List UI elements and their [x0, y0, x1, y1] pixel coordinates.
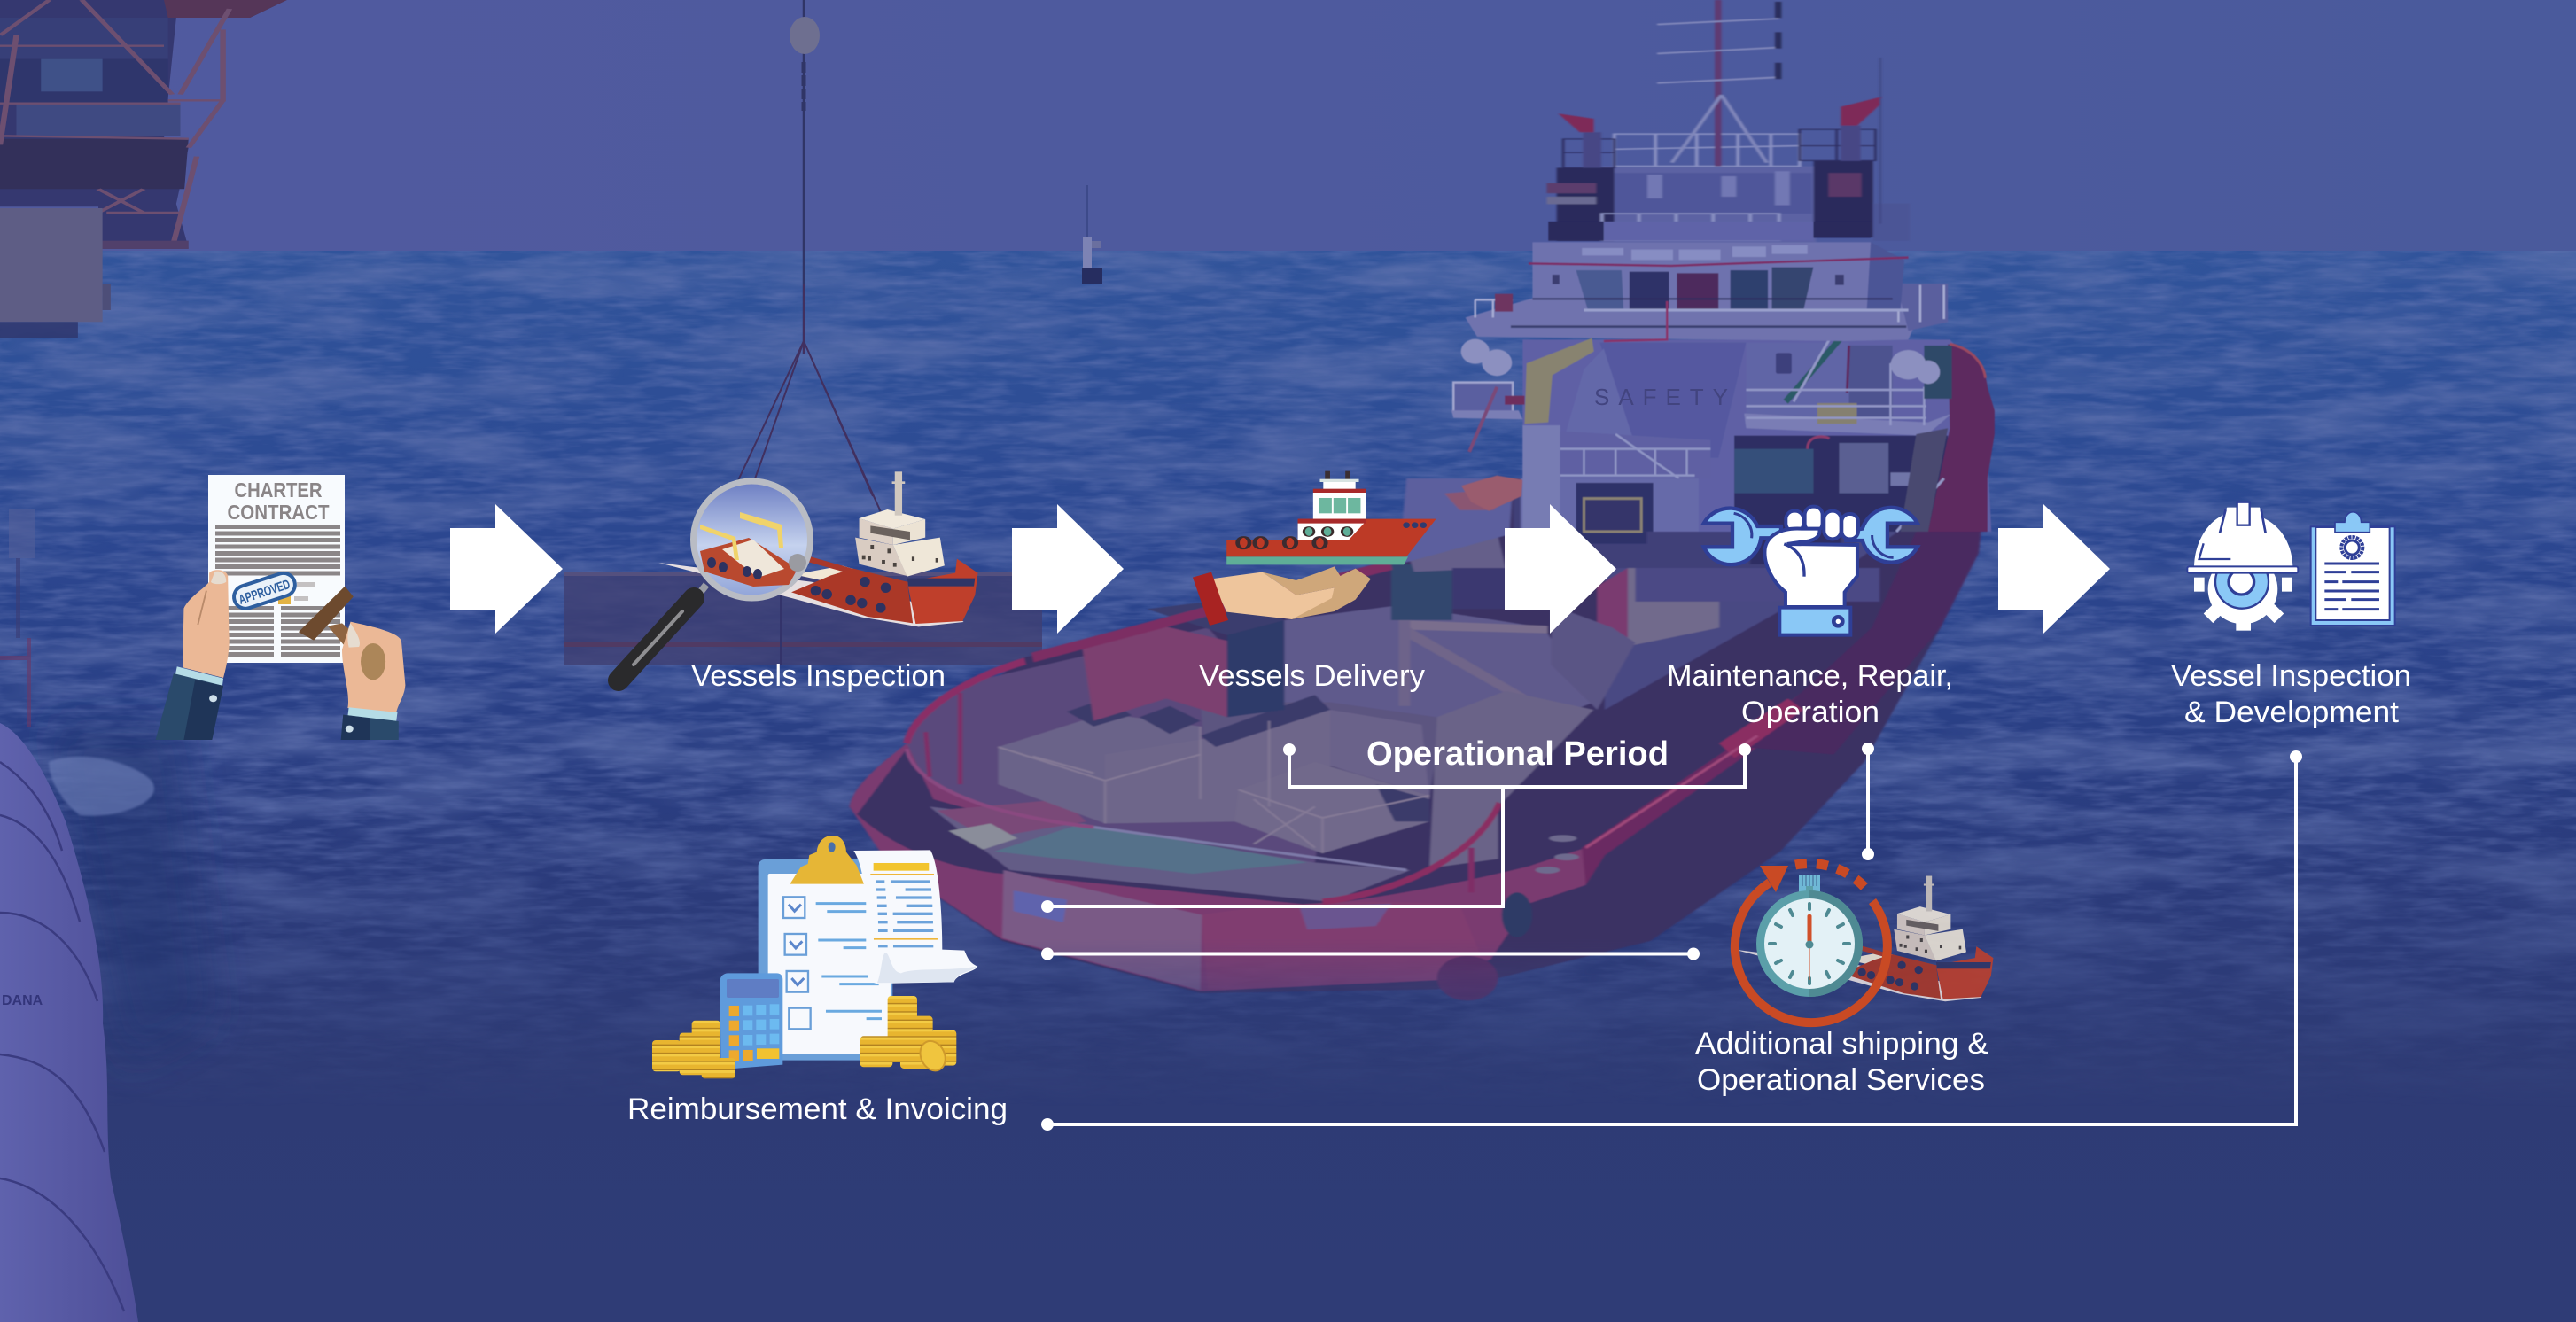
- handle: [696, 585, 706, 598]
- contract text lines: [215, 525, 340, 657]
- clipboard: [759, 859, 892, 1061]
- left wing: [1466, 284, 1948, 341]
- oil rig top left: [0, 0, 287, 338]
- lens: [693, 481, 810, 598]
- yellow crane: [1525, 338, 1594, 424]
- label: Reimbursement & Invoicing: Reimbursement & Invoicing: [627, 1093, 1008, 1126]
- round hawse: [1502, 892, 1532, 937]
- right bulwark: [1582, 583, 1954, 885]
- label: Maintenance, Repair, Operation: [1667, 659, 1953, 729]
- mid block: [1602, 167, 1816, 243]
- deck floor: [930, 806, 1410, 902]
- label: Vessel Inspection & Development: & Development: [2184, 696, 2400, 729]
- distant platform: [1082, 185, 1102, 284]
- hand: [1262, 566, 1371, 619]
- cabin: [1319, 479, 1359, 482]
- right wall: [1747, 343, 1849, 416]
- dark container column: [1227, 620, 1284, 717]
- crates: [999, 713, 1201, 823]
- calculator: [720, 973, 782, 1069]
- lower house dark: [1734, 436, 1948, 532]
- hull: [1226, 519, 1436, 556]
- house lower section: [1514, 478, 1856, 568]
- step 5: vessel inspection and development icon: [2187, 502, 2395, 631]
- mast and yardarms: [1715, 0, 1722, 167]
- label: Maintenance, Repair, Operation: Operation: [1741, 696, 1879, 729]
- reimbursement and invoicing icon: [652, 836, 977, 1078]
- checklist: [783, 897, 811, 1029]
- label: Additional shipping & Operational Services: Operational Services: [1697, 1063, 1985, 1097]
- left wrench: [1704, 509, 1781, 564]
- stairs: [1786, 335, 1843, 401]
- bridge-side deck space: [1604, 532, 1897, 709]
- maintenance to additional services: [1862, 743, 1874, 860]
- offshore supply vessel: hull and deck: [850, 478, 1987, 1000]
- main wall: [1522, 339, 1991, 532]
- helmet: [2194, 508, 2292, 566]
- label: Additional shipping & Operational Services: [1695, 1027, 1988, 1097]
- arrow 2: [1012, 504, 1124, 634]
- contract subtitle: CONTRACT: [227, 501, 330, 524]
- railings: [1602, 134, 1800, 240]
- arrow 3: [1505, 504, 1616, 634]
- magnifying glass: [619, 481, 810, 680]
- left mooring post: [0, 509, 35, 727]
- red container: [1082, 626, 1227, 721]
- additional services to reimbursement: [1041, 948, 1700, 960]
- clip: [790, 836, 864, 884]
- fingers: [1786, 507, 1858, 539]
- crane hook and slings: [700, 0, 922, 576]
- connector lines: [1041, 743, 2302, 1131]
- vessel superstructure: mast and top decks: [1547, 0, 1910, 243]
- domes: [1461, 339, 1940, 384]
- inspected ship: [658, 471, 978, 626]
- label: Additional shipping & Operational Services: Additional shipping &: [1695, 1027, 1988, 1061]
- arrow 1: [450, 504, 563, 634]
- dark towers: [1557, 167, 1615, 241]
- beige mid cargo: [1283, 606, 1592, 717]
- step 3: vessels delivery icon: [1193, 471, 1436, 626]
- approved stamp mark: APPROVED: [237, 577, 292, 608]
- stamp: [328, 623, 382, 666]
- contract title: CHARTER: [234, 478, 323, 502]
- top windows: [1582, 245, 1808, 260]
- deck rail with lifeboat side: [1453, 383, 1513, 412]
- tall beige deck cargo: [1429, 691, 1593, 868]
- label: Maintenance, Repair, Operation: Maintenance, Repair,: [1667, 659, 1953, 693]
- arrow 4: [1998, 504, 2110, 634]
- net and rails: [1560, 432, 1710, 478]
- step 2: vessels inspection icon: [619, 471, 978, 680]
- stopwatch body: [1756, 875, 1863, 997]
- vessel inspection to reimbursement: [1041, 750, 2302, 1131]
- coin stacks right: [860, 996, 956, 1069]
- hull base: [850, 478, 1987, 993]
- label: Vessel Inspection & Development: Vessel Inspection: [2171, 659, 2411, 693]
- circular arrow: [1735, 864, 1887, 1023]
- sky: [0, 0, 2576, 251]
- water monitors: [1559, 113, 1594, 132]
- step 4: maintenance wrench and fist icon: [1704, 507, 1918, 635]
- cuff: [1779, 608, 1850, 635]
- cargo bay back: [1202, 702, 1437, 795]
- balcony: [1744, 414, 1952, 436]
- cargo basket in crane: [564, 572, 1042, 665]
- splash: [49, 757, 154, 816]
- enlarged ship in lens: [700, 538, 798, 587]
- shadow beside fender: [53, 727, 213, 1063]
- safety panel: [1599, 343, 1747, 458]
- door area: [1560, 478, 1699, 532]
- approved stamp mark: [231, 571, 298, 611]
- ship: [1735, 876, 1993, 1001]
- operational period bracket to reimbursement: [1041, 743, 1751, 913]
- label: Vessels Delivery: Vessels Delivery: [1199, 659, 1425, 693]
- receipt: [853, 850, 977, 984]
- stern fender drums: [1002, 870, 1202, 990]
- additional shipping services icon: ship and stopwatch: [1735, 864, 1993, 1023]
- fist: [1764, 528, 1857, 607]
- clipboard: [2311, 526, 2395, 626]
- funnels: [1325, 471, 1350, 480]
- large purple fender tube: DANA: [2, 993, 43, 1008]
- red stern hull: [850, 743, 1585, 992]
- dark top floor: [1548, 222, 1604, 241]
- deck well inside bulwark: [907, 627, 1330, 863]
- step 1: charter contract icon: [156, 475, 405, 740]
- pedestal left crane: [1399, 478, 1514, 564]
- bridge house: [1532, 242, 1879, 299]
- right wrench: [1846, 508, 1918, 563]
- coin stacks left: [652, 1021, 720, 1075]
- red hull edge: [1928, 344, 1995, 532]
- container stack behind arrow: [1391, 564, 1452, 620]
- contract paper: [208, 475, 345, 663]
- upper rail: [1532, 298, 1893, 299]
- SAFETY lettering on vessel: SAFETY: [1594, 384, 1728, 410]
- hands and stamp: [156, 570, 405, 740]
- bridge windows: [1576, 270, 1623, 310]
- gear: [2194, 555, 2292, 631]
- label: Vessels Inspection: Vessels Inspection: [691, 659, 946, 693]
- red rails: [907, 565, 1757, 902]
- portholes: [1304, 527, 1352, 536]
- large purple fender tube: [0, 723, 138, 1322]
- label: Vessel Inspection & Development: [2171, 659, 2411, 729]
- vessel superstructure: bridge house: [1451, 222, 1995, 532]
- heading: Operational Period: Operational Period: [1366, 735, 1669, 773]
